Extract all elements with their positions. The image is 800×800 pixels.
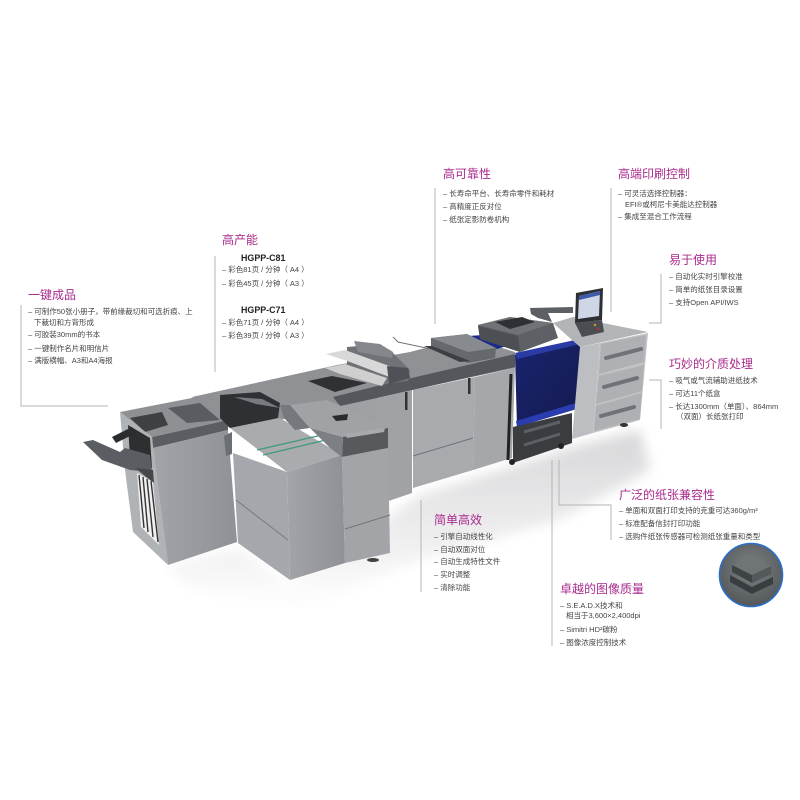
panel: high-end print control <box>611 166 718 312</box>
feature list: （双面）长纸张打印 <box>676 411 744 421</box>
panel: high productivity <box>215 232 309 372</box>
leader line <box>649 380 661 429</box>
blue print engine <box>467 335 580 465</box>
feature list: – 集成至混合工作流程 <box>618 211 692 221</box>
heading: 高产能 <box>222 232 258 247</box>
feature list: – 一键制作名片和明信片 <box>28 343 109 353</box>
leader line <box>610 188 612 312</box>
feature list: – 图像浓度控制技术 <box>560 637 627 647</box>
rear long engine units <box>333 354 515 512</box>
feature list <box>560 600 641 647</box>
finisher centre unit <box>220 392 345 580</box>
panel: one-touch finishing <box>21 288 193 406</box>
scanner and document feeder <box>478 307 573 352</box>
leader line <box>434 188 436 324</box>
feature list: – 自动化实时引擎校准 <box>669 271 743 281</box>
model C81 specs <box>222 253 309 288</box>
leader line <box>649 274 661 323</box>
model C71 specs: HGPP-C71 <box>241 305 285 315</box>
feature list: – 高精度正反对位 <box>443 201 502 211</box>
panel: simple and efficient <box>421 500 501 592</box>
model C81 specs: HGPP-C81 <box>241 253 285 263</box>
leader line <box>551 460 553 646</box>
heading: 易于使用 <box>669 252 717 267</box>
leader line <box>214 256 216 372</box>
panel: image quality <box>552 460 644 647</box>
feature list: – 长达1300mm（单面）、864mm <box>669 401 778 411</box>
feature list: – 自动双面对位 <box>434 544 486 554</box>
panel: paper compatibility <box>559 460 761 541</box>
paper folder unit on top <box>325 341 410 386</box>
feature list: – 选购件纸张传感器可检测纸张重量和类型 <box>619 531 761 541</box>
feature list: – 标准配备信封打印功能 <box>619 518 701 528</box>
feature list: – Simitri HD²碳粉 <box>560 624 618 634</box>
panel: high reliability <box>435 166 555 324</box>
leader line <box>21 305 108 406</box>
feature list: – 吸气或气流辅助进纸技术 <box>669 375 758 385</box>
finisher front right unit <box>280 400 390 563</box>
feature list: – 支持Open API/IWS <box>669 297 739 307</box>
finisher left unit <box>120 397 237 565</box>
feature list: – 满版横幅、A3和A4海报 <box>28 355 113 365</box>
feature list <box>618 188 718 221</box>
side paper feeder cabinet <box>553 317 648 439</box>
heading: 广泛的纸张兼容性 <box>619 487 715 502</box>
inline stacker tray and wire <box>393 334 496 363</box>
heading: 高端印刷控制 <box>618 166 690 181</box>
panel: ease of use <box>649 252 743 323</box>
feature list <box>434 531 501 592</box>
feature list: – 可灵活选择控制器： <box>618 188 692 198</box>
feature list <box>28 306 193 365</box>
feature list <box>669 271 743 307</box>
printing press machine <box>83 288 648 580</box>
leader line <box>559 460 611 540</box>
floor reflection <box>165 430 650 610</box>
model C71 specs: – 彩色39页 / 分钟（ A3 ） <box>222 330 309 340</box>
feature list <box>443 188 555 224</box>
top opening of rear unit <box>308 376 367 392</box>
rear top surface <box>192 337 515 428</box>
feature list: – 自动生成特性文件 <box>434 556 501 566</box>
feature list: – 纸张定影防卷机构 <box>443 214 510 224</box>
feature list: – 可制作50张小册子，带前缘裁切和可选折痕、上 <box>28 306 193 316</box>
feature list: – 实时调整 <box>434 569 471 579</box>
feature list: – 引擎自动线性化 <box>434 531 493 541</box>
icon: sensor close-up circle <box>720 544 782 606</box>
feature list <box>619 505 761 541</box>
feature list: – 可达11个纸盒 <box>669 388 721 398</box>
heading: 高可靠性 <box>443 166 491 181</box>
panel: media handling <box>649 356 778 429</box>
feature list: – 简单的纸张目录设置 <box>669 284 743 294</box>
feature list: – 长寿命平台、长寿命零件和耗材 <box>443 188 555 198</box>
model C71 specs <box>222 305 309 340</box>
feature list: – 单面和双面打印支持的克重可达360g/m² <box>619 505 758 515</box>
control touch screen <box>575 288 604 337</box>
feature list: EFI®或柯尼卡美能达控制器 <box>625 199 718 209</box>
model C71 specs: – 彩色71页 / 分钟（ A4 ） <box>222 317 309 327</box>
leader line <box>420 500 422 592</box>
heading: 一键成品 <box>28 288 76 302</box>
feature list: – 清除功能 <box>434 582 471 592</box>
feature list: 相当于3,600×2,400dpi <box>566 610 641 620</box>
fold-out tray <box>83 427 154 483</box>
heading: 简单高效 <box>434 512 482 527</box>
feature list: – S.E.A.D.X技术和 <box>560 600 623 610</box>
model C81 specs: – 彩色45页 / 分钟（ A3 ） <box>222 278 309 288</box>
heading: 卓越的图像质量 <box>560 581 644 596</box>
feature list: – 可胶装30mm的书本 <box>28 329 101 339</box>
feature list <box>669 375 778 421</box>
feature list: 下裁切和方背形成 <box>34 317 94 327</box>
model C81 specs: – 彩色81页 / 分钟（ A4 ） <box>222 264 309 274</box>
heading: 巧妙的介质处理 <box>669 356 753 371</box>
